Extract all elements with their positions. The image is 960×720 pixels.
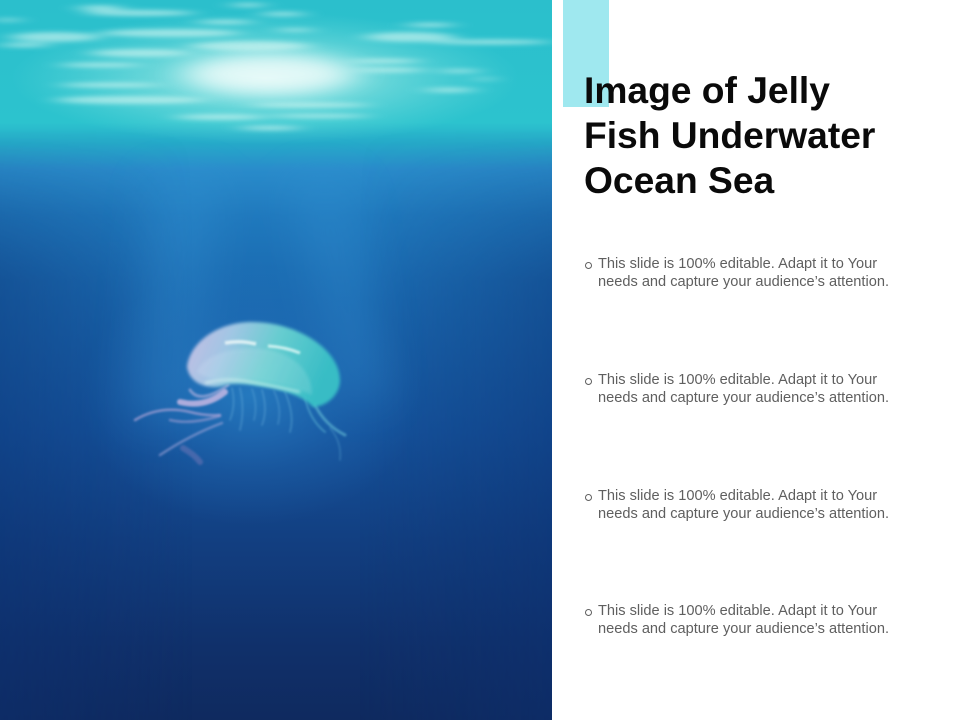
bullet 2 xyxy=(585,372,889,406)
bullet 1 xyxy=(585,256,889,290)
title: Fish Underwater xyxy=(584,114,875,156)
surface light xyxy=(0,2,550,144)
bell xyxy=(187,322,340,407)
bullet 2: needs and capture your audience’s attention. xyxy=(598,390,889,406)
light rays xyxy=(130,180,390,420)
bullet 1: needs and capture your audience’s attention. xyxy=(598,274,889,290)
bullet 1: This slide is 100% editable. Adapt it to Your xyxy=(598,256,877,272)
bullet 4: This slide is 100% editable. Adapt it to Your xyxy=(598,603,877,619)
bell highlights xyxy=(225,342,256,344)
accent rectangle xyxy=(563,0,609,107)
bullet 4 xyxy=(585,603,889,637)
bullet 3 xyxy=(585,488,889,522)
title: Ocean Sea xyxy=(584,159,774,201)
bullet 4: needs and capture your audience’s attention. xyxy=(598,621,889,637)
title: Image of Jelly xyxy=(584,69,830,111)
title xyxy=(584,69,875,201)
jellyfish xyxy=(80,265,420,525)
bullet 2: This slide is 100% editable. Adapt it to Your xyxy=(598,372,877,388)
bullet 3: needs and capture your audience’s attention. xyxy=(598,506,889,522)
photo: underwater ocean with jellyfish xyxy=(0,0,552,720)
tentacles xyxy=(135,385,345,462)
bullet 3: This slide is 100% editable. Adapt it to Your xyxy=(598,488,877,504)
